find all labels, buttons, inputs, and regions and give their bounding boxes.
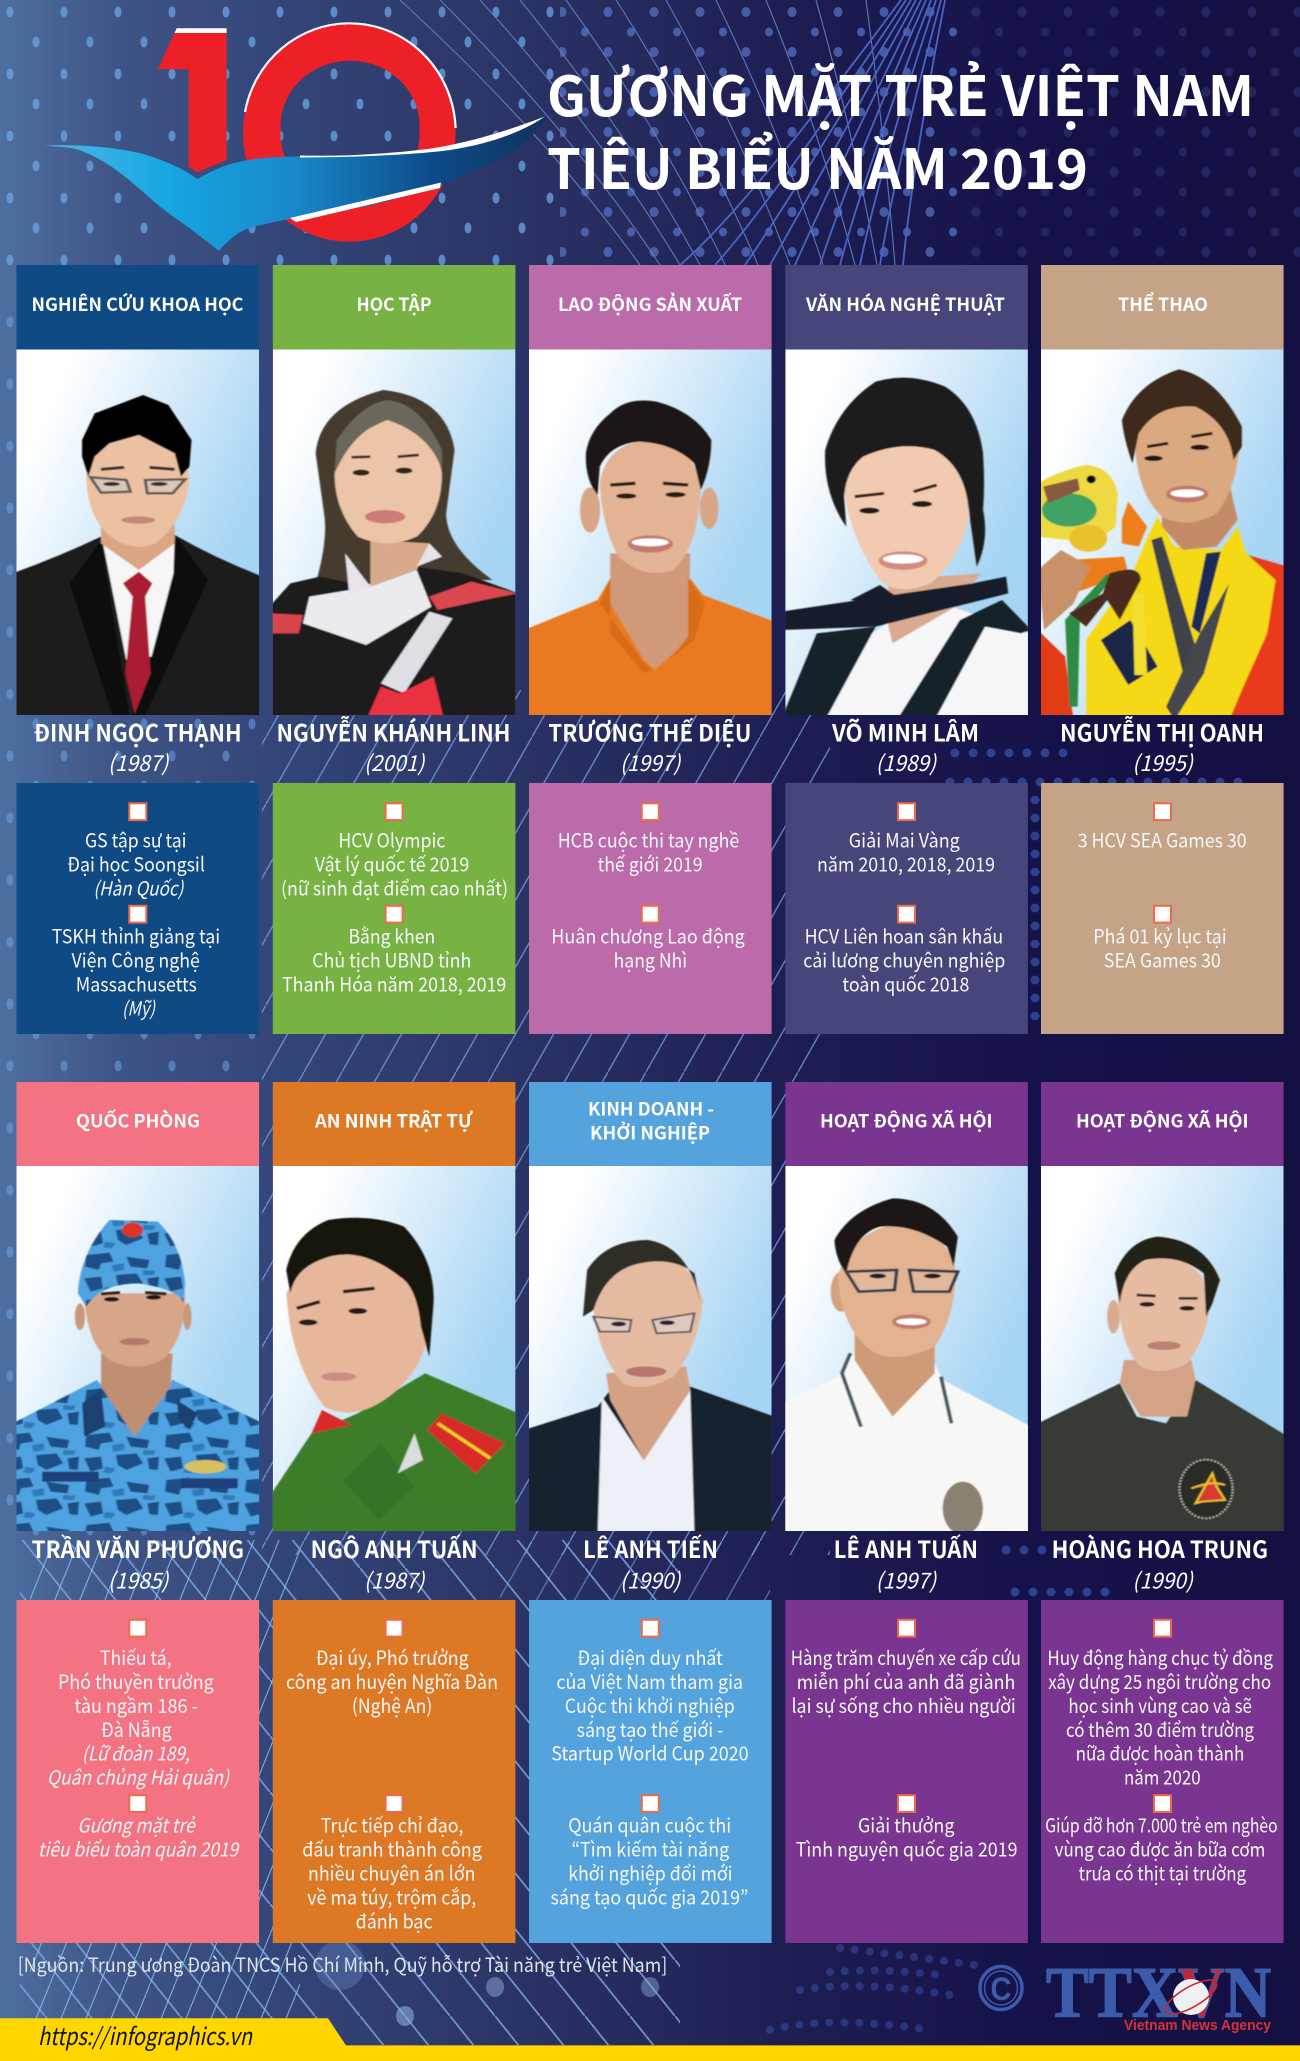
category header: HOẠT ĐỘNG XÃ HỘI <box>1076 1108 1248 1134</box>
category header <box>785 1082 1028 1166</box>
name: HOÀNG HOA TRUNG <box>1052 1531 1268 1565</box>
logo: TTXVN Vietnam News Agency: Vietnam News Agency <box>1124 2017 1272 2034</box>
portrait <box>13 350 263 720</box>
panel: Hoàng Hoa Trung <box>1038 1082 1288 1943</box>
portrait <box>269 1166 519 1535</box>
logo: red number 10 with blue swoosh <box>43 23 545 251</box>
achievements box: (Hàn Quốc) <box>93 872 185 902</box>
title <box>547 52 1254 205</box>
birth year: (1990) <box>620 1564 682 1596</box>
achievements box: Thiếu tá, <box>100 1642 172 1671</box>
achievements box: (Mỹ) <box>122 992 156 1022</box>
portrait <box>1038 1166 1288 1535</box>
achievements box: về ma túy, trộm cắp, <box>307 1881 476 1910</box>
achievements box: hạng Nhì <box>614 944 687 974</box>
achievements box: nữa được hoàn thành <box>1076 1738 1244 1766</box>
name: TRẦN VĂN PHƯƠNG <box>32 1531 244 1565</box>
achievements box: SEA Games 30 <box>1104 944 1221 974</box>
achievements box: Bằng khen <box>348 920 435 950</box>
achievements box: Giải Mai Vàng <box>849 824 960 854</box>
category header <box>785 265 1028 350</box>
achievements box: xây dựng 25 ngôi trường cho <box>1048 1666 1271 1695</box>
name: ĐINH NGỌC THẠNH <box>34 714 242 748</box>
panel: Đinh Ngọc Thạnh <box>13 265 263 1034</box>
achievements box: có thêm 30 điểm trường <box>1066 1714 1254 1743</box>
achievements box <box>16 783 259 1034</box>
achievements box: HCV Liên hoan sân khấu <box>805 920 1003 950</box>
category header <box>1041 265 1284 350</box>
panel: Trần Văn Phương <box>13 1082 263 1943</box>
category header <box>1041 1082 1284 1166</box>
achievements box: (Nghệ An) <box>352 1690 432 1719</box>
achievements box <box>16 1600 259 1943</box>
achievements box: Đại úy, Phó trưởng <box>316 1642 469 1671</box>
achievements box: Viện Công nghệ <box>72 944 200 974</box>
achievements box: cải lương chuyên nghiệp <box>803 944 1005 974</box>
achievements box: Huy động hàng chục tỷ đồng <box>1047 1642 1273 1671</box>
achievements box: Quân chủng Hải quân) <box>47 1762 230 1790</box>
achievements box: nhiều chuyên án lớn <box>308 1857 476 1886</box>
achievements box: Thanh Hóa năm 2018, 2019 <box>282 968 506 998</box>
category header <box>16 265 259 350</box>
portrait <box>781 350 1031 720</box>
achievements box: trưa có thịt tại trường <box>1079 1857 1246 1886</box>
panel: Trương Thế Diệu <box>524 265 774 1034</box>
achievements box: sáng tạo quốc gia 2019” <box>550 1881 748 1910</box>
portrait <box>524 1166 774 1535</box>
achievements box: học sinh vùng cao và sẽ <box>1068 1690 1252 1719</box>
birth year: (1997) <box>620 746 682 778</box>
name: NGÔ ANH TUẤN <box>311 1531 478 1565</box>
panel: Nguyễn Khánh Linh <box>269 265 519 1034</box>
birth year: (1995) <box>1132 746 1194 778</box>
birth year: (1985) <box>108 1564 170 1596</box>
achievements box: đánh bạc <box>356 1905 433 1934</box>
achievements box: miễn phí của anh đã giành <box>797 1666 1015 1695</box>
category header: HỌC TẬP <box>356 291 432 317</box>
achievements box: Quán quân cuộc thi <box>568 1809 731 1838</box>
achievements box: Đại diện duy nhất <box>577 1642 723 1671</box>
icon: copyright symbol: C <box>990 1971 1012 2007</box>
category header: VĂN HÓA NGHỆ THUẬT <box>805 291 1005 317</box>
category header: LAO ĐỘNG SẢN XUẤT <box>558 291 742 317</box>
achievements box: Phó thuyền trưởng <box>58 1666 214 1695</box>
achievements box: năm 2010, 2018, 2019 <box>817 848 995 878</box>
achievements box: Huân chương Lao động <box>551 920 745 950</box>
achievements box <box>785 783 1028 1034</box>
birth year: (1990) <box>1132 1564 1194 1596</box>
panel: Lê Anh Tuấn <box>781 1082 1031 1943</box>
achievements box <box>1041 1600 1284 1943</box>
panel: Ngô Anh Tuấn <box>269 1082 519 1943</box>
birth year: (2001) <box>364 746 426 778</box>
footer band with website url <box>0 2017 1300 2061</box>
category header: KINH DOANH - <box>588 1096 714 1122</box>
achievements box: Chủ tịch UBND tỉnh <box>312 944 471 974</box>
achievements box: vùng cao được ăn bữa cơm <box>1055 1833 1265 1862</box>
icon: copyright symbol <box>980 1966 1022 2010</box>
footer band with website url: https://infographics.vn <box>38 2017 253 2052</box>
achievements box: của Việt Nam tham gia <box>556 1666 743 1695</box>
title: TIÊU BIỂU NĂM 2019 <box>547 125 1088 205</box>
name: TRƯƠNG THẾ DIỆU <box>548 714 751 748</box>
portrait <box>1038 350 1288 720</box>
achievements box: lại sự sống cho nhiều người <box>792 1690 1016 1719</box>
achievements box: Đà Nẵng <box>101 1714 172 1743</box>
achievements box: Massachusetts <box>76 968 197 998</box>
category header <box>273 265 515 350</box>
portrait <box>269 350 519 720</box>
achievements box <box>785 1600 1028 1943</box>
achievements box: toàn quốc 2018 <box>842 968 969 998</box>
category header: THỂ THAO <box>1118 291 1208 317</box>
birth year: (1997) <box>876 1564 938 1596</box>
achievements box <box>273 783 515 1034</box>
name: LÊ ANH TUẤN <box>834 1531 978 1565</box>
birth year: (1987) <box>108 746 170 778</box>
achievements box <box>529 1600 772 1943</box>
achievements box: TSKH thỉnh giảng tại <box>52 920 220 950</box>
name: NGUYỄN KHÁNH LINH <box>276 714 510 748</box>
achievements box: đấu tranh thành công <box>302 1833 482 1862</box>
achievements box: sáng tạo thế giới - <box>577 1714 723 1743</box>
panel: Nguyễn Thị Oanh <box>1038 265 1288 1034</box>
achievements box: công an huyện Nghĩa Đàn <box>286 1666 498 1695</box>
achievements box: Startup World Cup 2020 <box>551 1738 749 1766</box>
birth year: (1987) <box>364 1564 426 1596</box>
category header: KHỞI NGHIỆP <box>590 1120 710 1146</box>
portrait <box>524 350 774 720</box>
achievements box: Vật lý quốc tế 2019 <box>315 848 469 878</box>
achievements box: (Lữ đoàn 189, <box>82 1738 190 1766</box>
achievements box: Cuộc thi khởi nghiệp <box>565 1690 735 1719</box>
achievements box: Gương mặt trẻ <box>77 1809 197 1838</box>
category header <box>16 1082 259 1166</box>
achievements box: Phá 01 kỷ lục tại <box>1093 920 1227 950</box>
achievements box: năm 2020 <box>1124 1762 1201 1790</box>
portrait <box>13 1166 263 1535</box>
achievements box: 3 HCV SEA Games 30 <box>1078 824 1247 854</box>
achievements box: khởi nghiệp đổi mới <box>568 1857 733 1886</box>
category header: HOẠT ĐỘNG XÃ HỘI <box>820 1108 992 1134</box>
category header <box>529 1082 772 1166</box>
achievements box: Trực tiếp chỉ đạo, <box>321 1809 463 1838</box>
achievements box <box>529 783 772 1034</box>
achievements box: tiêu biểu toàn quân 2019 <box>38 1833 240 1862</box>
achievements box: GS tập sự tại <box>85 824 186 854</box>
achievements box: Hàng trăm chuyến xe cấp cứu <box>791 1642 1021 1671</box>
name: VÕ MINH LÂM <box>831 714 979 748</box>
achievements box <box>1041 783 1284 1034</box>
achievements box: Đại học Soongsil <box>67 848 205 878</box>
logo: TTXVN Vietnam News Agency: TTXVN <box>1046 1953 1271 2033</box>
category header <box>273 1082 515 1166</box>
achievements box: “Tìm kiếm tài năng <box>572 1833 729 1862</box>
achievements box: (nữ sinh đạt điểm cao nhất) <box>281 872 508 902</box>
category header <box>529 265 772 350</box>
portrait <box>781 1166 1031 1535</box>
title: GƯƠNG MẶT TRẺ VIỆT NAM <box>547 52 1254 132</box>
source note: [Nguồn: Trung ương Đoàn TNCS Hồ Chí Minh, Quỹ hỗ trợ Tài năng trẻ Việt Nam] <box>18 1949 667 1978</box>
achievements box: HCB cuộc thi tay nghề <box>558 824 739 854</box>
name: LÊ ANH TIẾN <box>583 1531 718 1565</box>
achievements box: thế giới 2019 <box>598 848 703 878</box>
achievements box: Giải thưởng <box>858 1809 954 1838</box>
birth year: (1989) <box>876 746 938 778</box>
achievements box: HCV Olympic <box>338 824 445 854</box>
category header: AN NINH TRẬT TỰ <box>314 1108 473 1134</box>
achievements box: Tình nguyện quốc gia 2019 <box>796 1833 1018 1862</box>
panel: Lê Anh Tiến <box>524 1082 774 1943</box>
category header: QUỐC PHÒNG <box>76 1108 200 1134</box>
name: NGUYỄN THỊ OANH <box>1060 714 1264 748</box>
achievements box <box>273 1600 515 1943</box>
achievements box: tàu ngầm 186 - <box>74 1690 198 1719</box>
category header: NGHIÊN CỨU KHOA HỌC <box>32 291 244 317</box>
panel: Võ Minh Lâm <box>781 265 1031 1034</box>
